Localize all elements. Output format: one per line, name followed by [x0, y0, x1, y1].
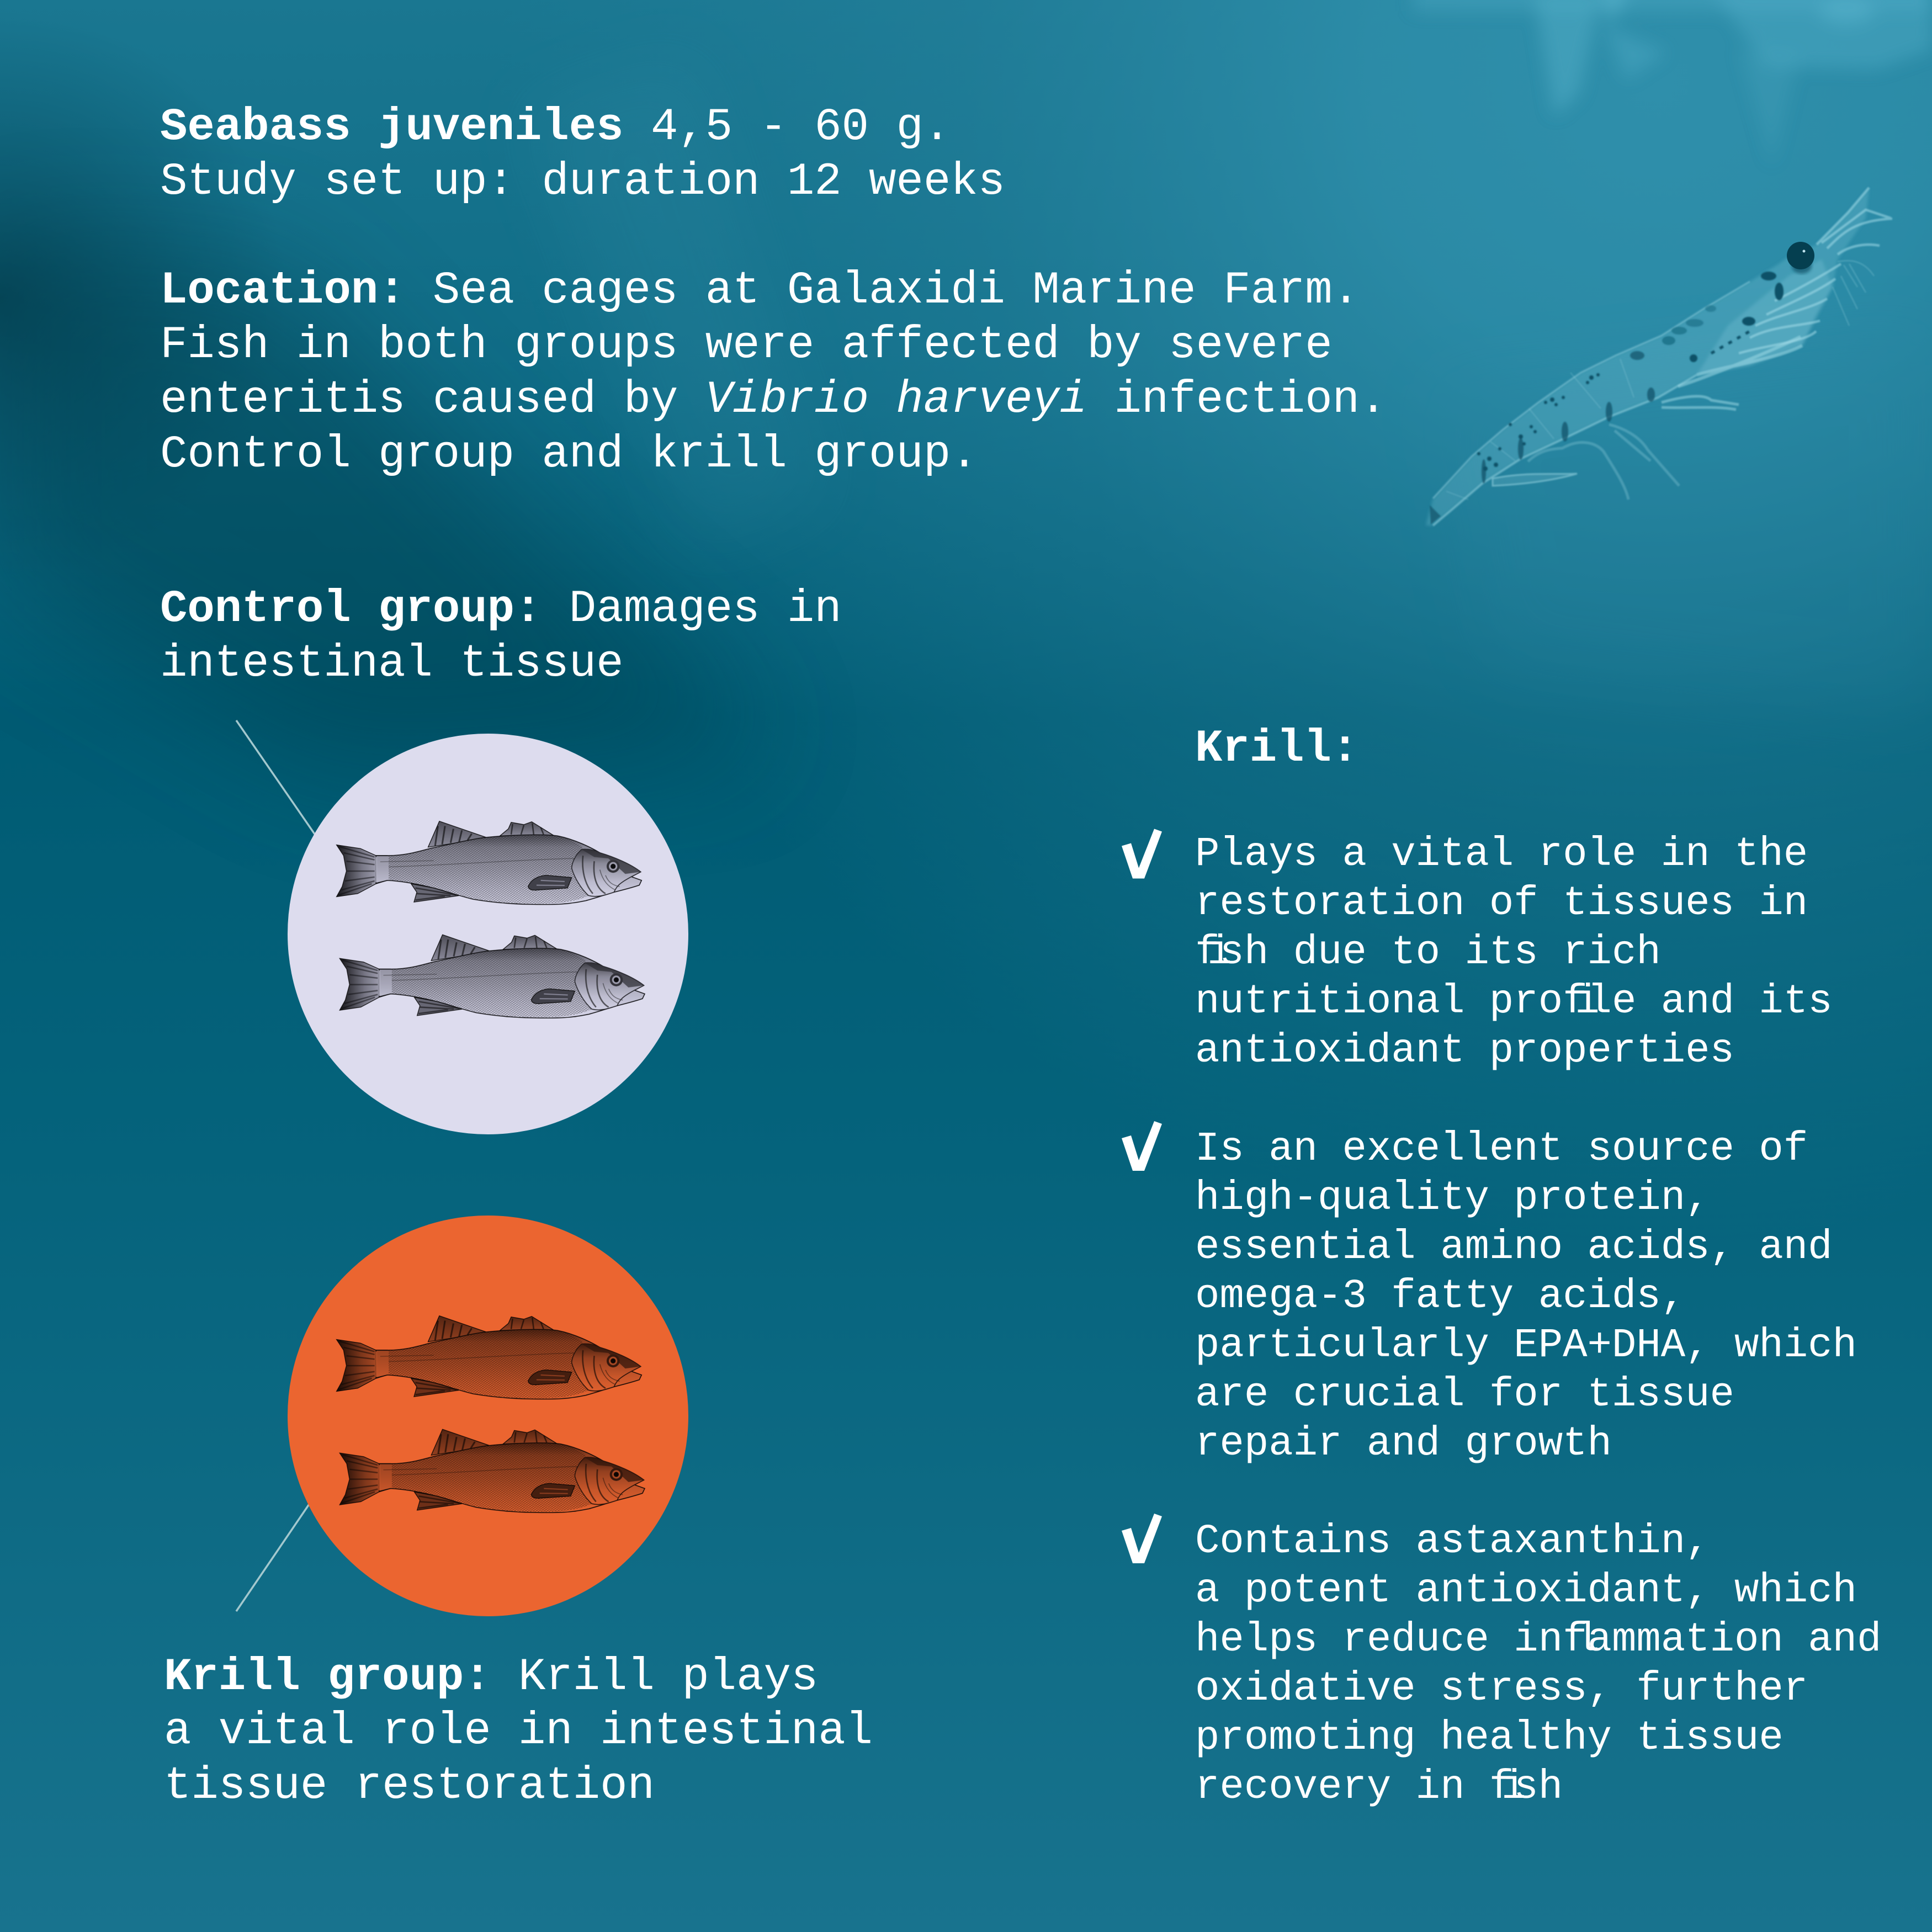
benefit two text: particularly EPA+DHA, which	[1195, 1323, 1857, 1369]
benefit one text: restoration of tissues in	[1195, 880, 1808, 927]
text block: krill group: Krill group: Krill plays	[164, 1651, 818, 1703]
heading: control group: intestinal tissue	[160, 638, 624, 689]
icon: orange seabass bottom	[339, 1429, 645, 1512]
krill illustration	[1426, 188, 1892, 526]
intro text: species and study set up: Study set up: duration 12 weeks	[160, 156, 1005, 208]
benefit two text: are crucial for tissue	[1195, 1372, 1734, 1418]
icon: check mark two	[1122, 1121, 1162, 1171]
benefit three text: a potent antioxidant, which	[1195, 1568, 1857, 1614]
benefit two text: essential amino acids, and	[1195, 1224, 1833, 1271]
benefit three text: oxidative stress, further	[1195, 1666, 1808, 1712]
benefit three text: Contains astaxanthin,	[1195, 1519, 1710, 1565]
text block: location and infection: Control group and krill group.	[160, 428, 978, 480]
text block: location and infection: enteritis caused by Vibrio harveyi infection.	[160, 374, 1387, 426]
leader line: krill group	[236, 1504, 309, 1611]
benefit two text: repair and growth	[1195, 1421, 1612, 1467]
text block: location and infection: Location: Sea cages at Galaxidi Marine Farm.	[160, 264, 1360, 316]
benefit one text: fish due to its rich	[1195, 930, 1661, 976]
text block: krill group: tissue restoration	[164, 1760, 655, 1812]
benefit three text: recovery in fish	[1195, 1764, 1563, 1811]
benefit two text: omega-3 fatty acids,	[1195, 1273, 1685, 1320]
intro text: species and study set up: Seabass juveniles 4,5 - 60 g.	[160, 101, 951, 153]
icon: orange seabass top	[337, 1316, 641, 1399]
icon: grey seabass bottom	[339, 935, 645, 1018]
icon: check mark one	[1122, 829, 1162, 879]
benefit one text: Plays a vital role in the	[1195, 831, 1808, 878]
panel: krill group circle with two fish	[288, 1216, 688, 1616]
heading: krill: Krill:	[1195, 723, 1358, 774]
text block: location and infection: Fish in both groups were affected by severe	[160, 319, 1333, 371]
benefit three text: helps reduce inflammation and	[1195, 1617, 1881, 1663]
intro text: species and study set up	[160, 101, 1005, 208]
text block: krill group	[164, 1651, 873, 1812]
heading: control group: Control group: Damages in	[160, 583, 842, 635]
leader line: control group	[236, 720, 315, 834]
benefit three text	[1195, 1519, 1881, 1811]
benefit two text: high-quality protein,	[1195, 1175, 1710, 1222]
benefit one text: antioxidant properties	[1195, 1028, 1734, 1074]
benefit two text	[1195, 1126, 1857, 1467]
icon: grey seabass top	[337, 821, 641, 905]
icon: check mark three	[1122, 1514, 1162, 1563]
panel: control group circle with two fish	[288, 734, 688, 1134]
text block: location and infection	[160, 264, 1387, 480]
benefit three text: promoting healthy tissue	[1195, 1715, 1784, 1761]
heading: control group	[160, 583, 842, 689]
text block: krill group: a vital role in intestinal	[164, 1705, 873, 1757]
benefit one text	[1195, 831, 1833, 1074]
benefit two text: Is an excellent source of	[1195, 1126, 1808, 1172]
benefit one text: nutritional profile and its	[1195, 979, 1833, 1025]
